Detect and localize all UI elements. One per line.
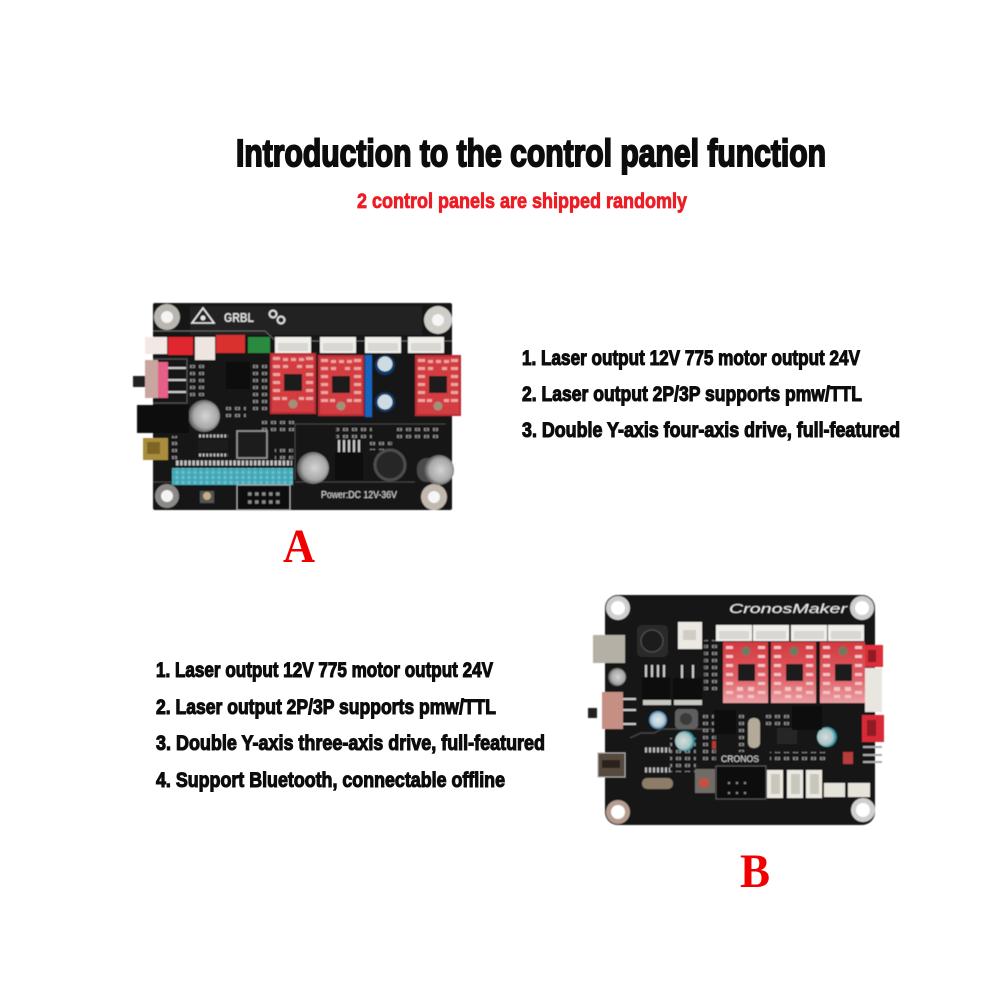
board A chips	[198, 362, 363, 480]
board B mini USB	[598, 753, 625, 777]
feature B4: 4. Support Bluetooth, connectable offline	[156, 769, 505, 792]
feature list B	[156, 659, 545, 792]
board B pin socket	[716, 766, 766, 799]
board B stepper drivers	[723, 642, 865, 703]
feature A3: 3. Double Y-axis four-axis drive, full-featured	[522, 419, 900, 442]
board B Cronos logo: CRONOS	[721, 754, 759, 764]
board A reset button	[200, 491, 214, 503]
board B switch	[588, 692, 636, 729]
board A connectors	[145, 335, 444, 360]
board A GRBL label: GRBL	[224, 310, 254, 325]
board B SMD parts	[670, 640, 825, 772]
letter B: B	[740, 845, 770, 898]
board A PCB	[153, 303, 452, 510]
board B inductors	[637, 625, 698, 729]
board B MOSFETs	[642, 665, 702, 705]
control board A	[133, 303, 461, 510]
feature list A	[522, 347, 900, 442]
board A teal pin header	[172, 468, 293, 485]
board B brand: CronosMaker	[729, 601, 848, 616]
control board B	[588, 595, 884, 825]
subtitle: 2 control panels are shipped randomly	[357, 190, 687, 213]
board B USB power port	[593, 635, 625, 663]
board B bottom connectors	[767, 770, 870, 798]
board B capacitors	[608, 668, 837, 751]
board A stepper drivers	[270, 353, 461, 417]
board A logo triangle	[192, 308, 214, 323]
board A power label: Power:DC 12V-36V	[321, 490, 397, 501]
board B microcontroller and crystal	[642, 706, 822, 789]
board B PCB	[605, 595, 875, 825]
board B top connectors	[678, 622, 864, 649]
board A gears icon	[270, 310, 284, 324]
feature A2: 2. Laser output 2P/3P supports pmw/TTL	[522, 383, 862, 406]
feature A1: 1. Laser output 12V 775 motor output 24V	[522, 347, 860, 370]
board A SMD parts	[168, 362, 440, 460]
board A switch	[133, 359, 187, 403]
board A power jack and USB	[137, 405, 189, 460]
feature B1: 1. Laser output 12V 775 motor output 24V	[156, 659, 493, 682]
board B reset button	[695, 769, 715, 793]
title: Introduction to the control panel function	[236, 133, 826, 175]
board B mounting holes	[606, 596, 875, 824]
board A mounting holes	[154, 304, 452, 510]
board A pin socket	[237, 485, 290, 510]
feature B2: 2. Laser output 2P/3P supports pmw/TTL	[156, 696, 496, 719]
feature B3: 3. Double Y-axis three-axis drive, full-featured	[156, 732, 545, 755]
letter A: A	[283, 520, 315, 573]
board A capacitors	[188, 355, 454, 485]
board B right connectors	[843, 645, 884, 764]
